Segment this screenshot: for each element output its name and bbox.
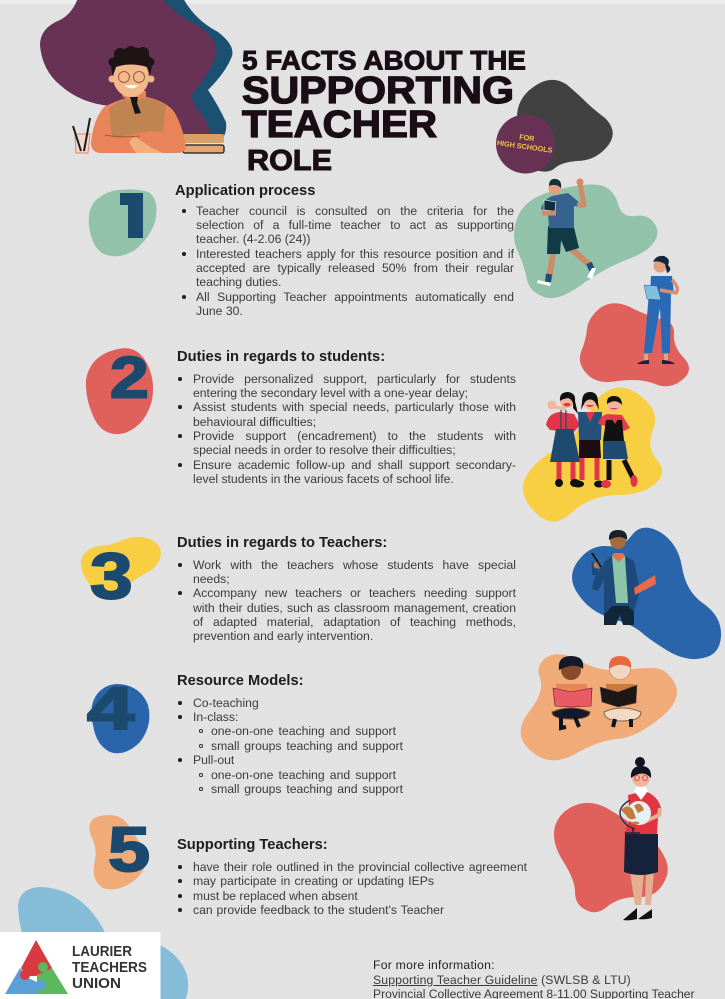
icon: student with book	[537, 178, 596, 286]
heading: application process: Application process	[175, 183, 315, 199]
number 5: 5	[108, 814, 150, 885]
logo: TEACHERS	[72, 960, 147, 976]
blob: number 1 background	[89, 189, 156, 256]
panel: application process: teacher. (4-2.06 (24))	[196, 232, 310, 246]
panel: application process: accepted are typically released 50% from their regular	[196, 261, 514, 275]
panel: duties to teachers: Work with the teachers whose students have special	[193, 558, 516, 572]
panel: duties to teachers: needs;	[193, 572, 230, 586]
badge blob: grey	[517, 80, 613, 172]
panel: application process	[175, 183, 514, 318]
panel: resource models: small groups teaching and support	[211, 739, 403, 753]
icon: teacher with pointer	[592, 530, 656, 625]
panel: resource models: Co-teaching	[193, 696, 259, 710]
badge: for high schools: FOR	[519, 132, 536, 143]
icon: children reading	[552, 656, 641, 728]
panel: duties to students: special needs in order to resolve their difficulties;	[193, 443, 456, 457]
number 1	[120, 193, 143, 238]
blob: yellow	[523, 388, 662, 522]
panel: resource models: one-on-one teaching and support	[211, 724, 396, 738]
panel: duties to students	[177, 349, 516, 486]
number 4: 4	[87, 674, 134, 742]
heading: supporting teachers: Supporting Teachers:	[177, 837, 328, 853]
footer: more information: Supporting Teacher Guideline (SWLSB & LTU)	[373, 973, 631, 987]
panel: resource models: Pull-out	[193, 753, 234, 767]
blob: blue	[572, 528, 721, 659]
title: TEACHER	[242, 104, 437, 146]
panel: duties to teachers: of adapted material, adaptation of teaching methods,	[193, 615, 516, 629]
blob: green	[514, 185, 658, 298]
panel: application process: Interested teachers apply for this resource position and if	[196, 247, 514, 261]
panel: resource models: small groups teaching and support	[211, 782, 403, 796]
header blob: purple	[40, 0, 216, 136]
panel: supporting teachers: can provide feedback to the student's Teacher	[193, 903, 444, 917]
panel: duties to students: Ensure academic follow-up and shall support secondary-	[193, 458, 516, 472]
number 2: 2	[110, 345, 149, 410]
panel: duties to teachers	[177, 535, 516, 643]
panel: duties to students: level students in the various facets of school life.	[193, 472, 454, 486]
blob: light blue behind logo	[18, 887, 188, 999]
title: ROLE	[247, 145, 332, 177]
blob: red	[580, 303, 689, 386]
blob: peach	[521, 654, 677, 760]
blob: number 4 background	[91, 684, 149, 753]
panel: duties to students: Provide support (encadrement) to the students with	[193, 429, 516, 443]
title: 5 FACTS ABOUT THE	[242, 46, 526, 76]
logo: LAURIER	[72, 944, 132, 960]
blob: red lower	[554, 803, 668, 912]
icon: man at desk	[73, 46, 224, 153]
panel: supporting teachers: have their role outlined in the provincial collective agreement	[193, 860, 527, 874]
badge: for high schools: HIGH SCHOOLS	[496, 138, 553, 155]
logo	[0, 932, 160, 999]
panel: duties to students: behavioural difficulties;	[193, 415, 316, 429]
panel: application process: June 30.	[196, 304, 243, 318]
icon: woman reading	[637, 256, 677, 364]
blob: number 2 background	[86, 348, 153, 434]
blob: number 5 background	[89, 815, 146, 889]
badge: for high schools	[496, 114, 555, 174]
panel: resource models: In-class:	[193, 710, 238, 724]
heading: resource models: Resource Models:	[177, 673, 304, 689]
panel: application process: selection of a full-time teacher to act as supporting	[196, 218, 514, 232]
panel: duties to students: Assist students with special needs, particularly those with	[193, 400, 516, 414]
heading: duties to students: Duties in regards to students:	[177, 349, 385, 365]
number 3: 3	[90, 541, 133, 613]
panel: duties to students: Provide personalized support, particularly for students	[193, 372, 516, 386]
title: SUPPORTING	[242, 70, 514, 112]
panel: resource models: one-on-one teaching and support	[211, 768, 396, 782]
title	[242, 46, 526, 177]
header blob: navy	[162, 0, 232, 136]
blob: number 3 background	[81, 537, 161, 595]
footer: more information: For more information:	[373, 958, 495, 972]
panel: duties to teachers: with their duties, such as classroom management, creation	[193, 601, 516, 615]
panel: supporting teachers: must be replaced when absent	[193, 889, 358, 903]
icon: teacher with globe	[620, 757, 661, 920]
logo: UNION	[72, 976, 121, 992]
panel: application process: Teacher council is consulted on the criteria for the	[196, 204, 514, 218]
icon: three schoolgirls	[546, 392, 638, 488]
panel: application process: teaching duties.	[196, 275, 281, 289]
panel: duties to teachers: Accompany new teachers or teachers needing support	[193, 586, 516, 600]
heading: duties to teachers: Duties in regards to Teachers:	[177, 535, 387, 551]
panel: duties to students: entering the secondary level with a one-year delay;	[193, 386, 468, 400]
panel: supporting teachers: may participate in creating or updating IEPs	[193, 874, 434, 888]
panel: application process: All Supporting Teacher appointments automatically end	[196, 290, 514, 304]
panel: duties to teachers: prevention and early intervention.	[193, 629, 373, 643]
